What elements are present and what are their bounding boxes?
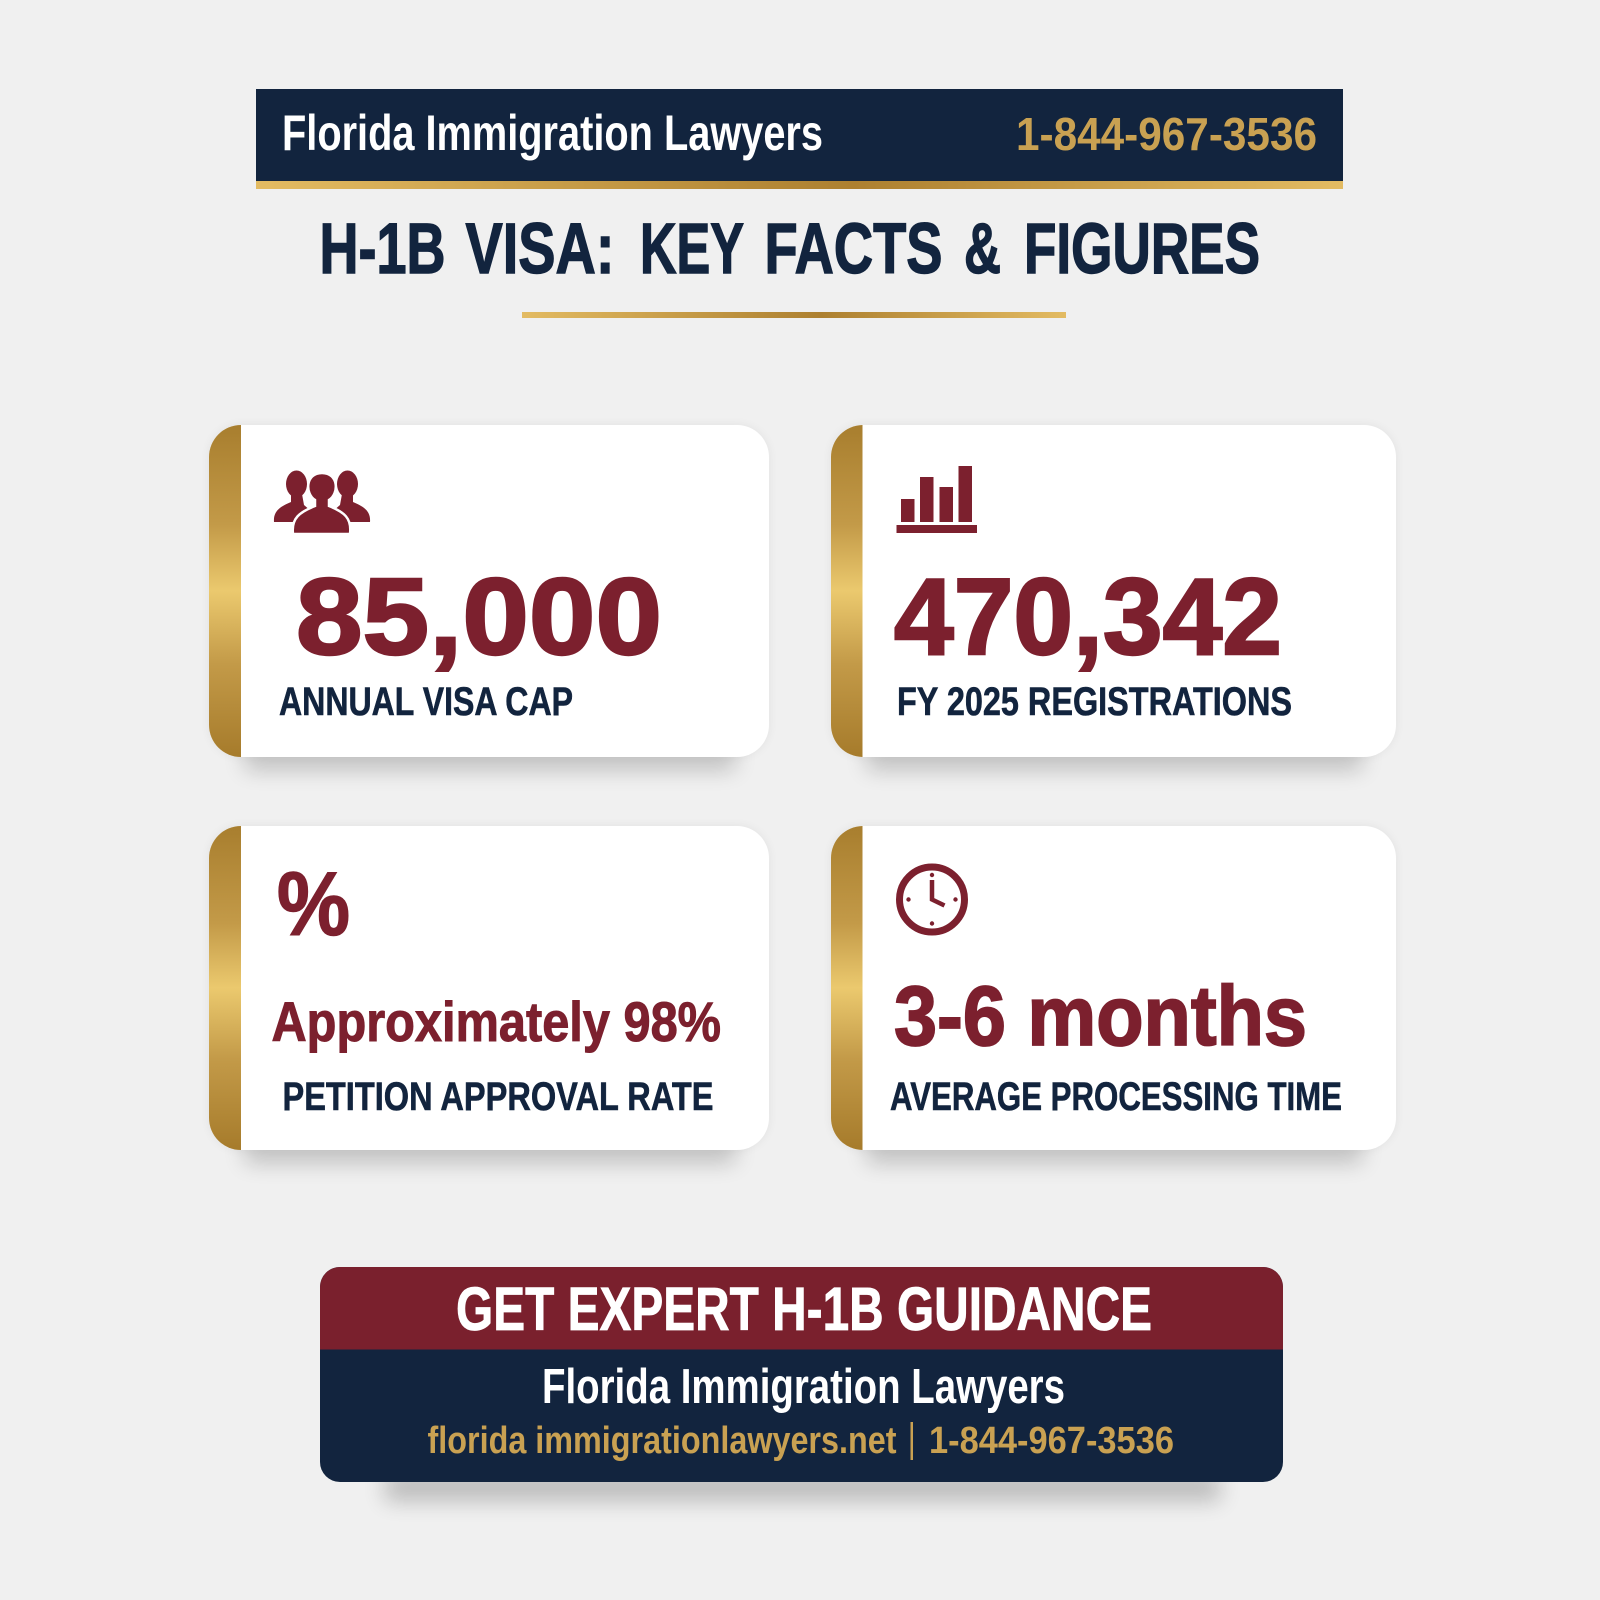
icon: bar chart [896,466,977,533]
title: & [964,210,1001,289]
title: FACTS [764,210,942,289]
stat value: 470,342 [894,556,1282,678]
title: FIGURES [1024,210,1260,289]
CTA heading: GET EXPERT H-1B GUIDANCE [456,1275,1152,1343]
panel: FY 2025 registrations [831,425,1396,770]
icon: percent: % [277,855,350,955]
title: H-1B [320,210,446,289]
panel: annual visa cap [209,425,769,770]
CTA firm name: Florida Immigration Lawyers [542,1360,1065,1414]
title underline [522,312,1066,318]
header phone number: 1-844-967-3536 [1016,108,1317,160]
title: VISA: [466,210,614,289]
icon: clock [900,867,964,932]
stat label: AVERAGE PROCESSING TIME [890,1075,1342,1119]
title: KEY [640,210,744,289]
header bar [256,89,1343,189]
CTA website and phone: florida immigrationlawyers.net [428,1420,897,1462]
stat label: ANNUAL VISA CAP [279,680,573,724]
panel: call to action [320,1267,1283,1501]
panel: petition approval rate [209,826,769,1163]
stat label: FY 2025 REGISTRATIONS [897,680,1292,724]
icon: people [274,470,370,534]
CTA website and phone: 1-844-967-3536 [929,1420,1174,1462]
stat value: 85,000 [296,556,662,678]
panel: average processing time [831,826,1396,1163]
stat label: PETITION APPROVAL RATE [282,1075,714,1119]
stat value: Approximately 98% [272,990,721,1053]
stat value: 3-6 months [894,969,1307,1063]
title [320,210,1260,289]
header firm name: Florida Immigration Lawyers [282,105,823,161]
